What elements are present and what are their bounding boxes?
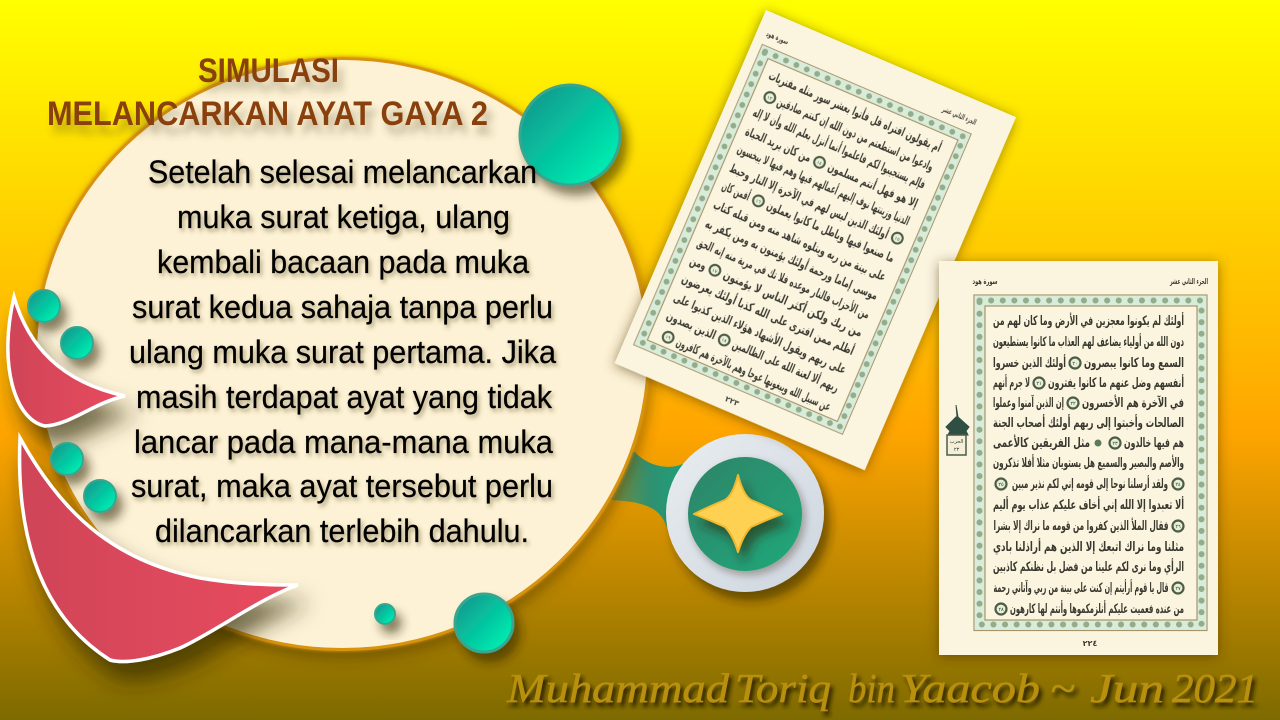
teal dot medium bbox=[455, 594, 513, 652]
connector between circle and star button bbox=[600, 452, 700, 540]
teal dot 3 bbox=[51, 443, 83, 475]
body text: Setelah selesai melancarkan bbox=[148, 154, 537, 190]
Quran page 224: الجزء الثاني عشر bbox=[1169, 277, 1208, 286]
signature: 2021 bbox=[1172, 665, 1258, 711]
body text bbox=[129, 154, 557, 549]
red shape upper bbox=[8, 297, 125, 426]
Quran page 224: أولئك الذين خسروا bbox=[993, 354, 1066, 371]
Quran page 223, tilted: على بينة من ربه ويتلوه شاهد منه ومن قبله كتاب bbox=[711, 197, 888, 284]
large cream circle panel bbox=[34, 57, 650, 651]
ayah markers bbox=[660, 91, 935, 412]
Quran page 224: السمع وما كانوا يبصرون bbox=[1084, 356, 1184, 371]
Quran page 223, tilted: سورة هود bbox=[765, 29, 790, 46]
ayah markers: ١٩ bbox=[664, 334, 672, 342]
ayah markers bbox=[996, 358, 1184, 614]
signature: Jun bbox=[1090, 665, 1164, 711]
body text: muka surat ketiga, ulang bbox=[177, 199, 510, 235]
Quran page 223, tilted: الدنيا وزينتها نوف إليهم أعمالهم فيها وهم فيها لا يبخسون bbox=[735, 140, 913, 228]
ayah markers: ١٦ bbox=[754, 198, 762, 206]
red shape lower bbox=[20, 438, 298, 662]
Quran page 223, tilted: الجزء الثاني عشر bbox=[941, 104, 978, 127]
Quran page 223, tilted: عن سبيل الله ويبغونها عوجا وهم بالآخرة هم كافرون bbox=[674, 335, 833, 414]
Quran page 223, tilted: ٢٢٣ bbox=[724, 394, 741, 408]
ayah markers: ٢٣ bbox=[1112, 441, 1118, 447]
signature bbox=[506, 665, 1258, 711]
decorative teal circle large bbox=[520, 85, 620, 185]
ayah markers: ١٥ bbox=[893, 235, 901, 243]
Quran page 223, tilted: فإلم يستجيبوا لكم فاعلموا أنما أنزل بعلم الله وأن لا إله bbox=[751, 103, 928, 192]
Quran page 224: لا جرم أنهم bbox=[993, 374, 1030, 391]
ayah markers: ٢٨ bbox=[998, 607, 1004, 613]
Quran page 223, tilted: ربهم ألا لعنة الله على الظالمين bbox=[730, 336, 842, 395]
Quran page 223, tilted: أولئك الذين ليس لهم في الآخرة إلا النار وحبط bbox=[728, 159, 892, 242]
Quran page 223, tilted: من ربك ولكن أكثر الناس لا يؤمنون bbox=[721, 266, 865, 340]
signature: Toriq bbox=[735, 665, 831, 711]
body text: masih terdapat ayat yang tidak bbox=[136, 379, 553, 415]
body text: dilancarkan terlebih dahulu. bbox=[155, 513, 529, 549]
Quran page 223, tilted: موسى إماما ورحمة أولئك يؤمنون به ومن يكفر به bbox=[703, 215, 881, 303]
signature: ~ bbox=[1050, 665, 1075, 711]
Quran page 224: أنفسهم وضل عنهم ما كانوا يفترون bbox=[1048, 374, 1184, 391]
body text: kembali bacaan pada muka bbox=[157, 244, 530, 280]
Quran page 223, tilted: أم يقولون افتراه قل فأتوا بعشر سور مثله مفتريات bbox=[766, 67, 944, 156]
Quran page 224: هم فيها خالدون bbox=[1124, 436, 1184, 451]
ayah markers: ٢٦ bbox=[1175, 524, 1181, 530]
body text: ulang muka surat pertama. Jika bbox=[129, 334, 557, 370]
icon: page medallion bbox=[946, 405, 969, 455]
Quran page 224: مثلنا وما نراك اتبعك إلا الذين هم أراذلنا بادي bbox=[993, 538, 1184, 555]
Quran page 224: سورة هود bbox=[972, 277, 998, 286]
body text: lancar pada mana-mana muka bbox=[134, 424, 554, 460]
Quran page 223, tilted: الذين يصدون bbox=[664, 308, 718, 343]
ayah markers: ٢٢ bbox=[1070, 401, 1076, 407]
Quran page 223, tilted: ما صنعوا فيها وباطل ما كانوا يعملون bbox=[765, 197, 897, 265]
ayah markers: ٢١ bbox=[1036, 381, 1042, 387]
teal dot 2 bbox=[61, 327, 93, 359]
Quran page 223, tilted bbox=[615, 10, 1016, 470]
ayah markers: ٢٤ bbox=[1175, 482, 1181, 488]
Quran page 223, tilted: من الأحزاب فالنار موعده فلا تك في مرية منه إنه الحق bbox=[695, 234, 872, 321]
Quran page 224: إن الذين آمنوا وعملوا bbox=[993, 394, 1064, 411]
Quran page 223, tilted: أفمن كان bbox=[720, 177, 753, 203]
Quran page 223, tilted: إلا هو فهل أنتم مسلمون bbox=[826, 158, 921, 211]
title: MELANCARKAN AYAT GAYA 2 bbox=[47, 95, 488, 133]
signature: bin bbox=[848, 665, 895, 711]
title bbox=[47, 52, 488, 133]
teal dot 1 bbox=[28, 290, 60, 322]
Quran page 223, tilted: ومن bbox=[688, 252, 709, 273]
Quran page 223, tilted: وادعوا من استطعتم من دون الله إن كنتم صادقين bbox=[775, 94, 936, 174]
ayah markers: ٢٧ bbox=[1175, 586, 1181, 592]
Quran page 223, tilted: على ربهم ويقول الأشهاد هؤلاء الذين كذبوا على bbox=[671, 290, 848, 377]
ayah markers: ١٤ bbox=[816, 159, 823, 167]
body text: surat, maka ayat tersebut perlu bbox=[131, 468, 553, 504]
Quran page 223, tilted: من كان يريد الحياة bbox=[743, 123, 814, 165]
signature: Yaacob bbox=[900, 665, 1040, 711]
icon: page medallion: الحزب bbox=[950, 439, 963, 445]
ayah markers: ٢٠ bbox=[1072, 361, 1078, 367]
title: SIMULASI bbox=[198, 52, 339, 90]
Quran page 224: في الآخرة هم الأخسرون bbox=[1082, 394, 1184, 411]
Quran page 224: مثل الفريقين كالأعمى bbox=[993, 434, 1090, 451]
teal dot 4 bbox=[84, 480, 116, 512]
icon: page medallion: ٢٣ bbox=[954, 447, 959, 453]
ayah markers: ٢٥ bbox=[998, 482, 1004, 488]
icon: four-point star bbox=[694, 475, 782, 552]
teal dot small bbox=[375, 604, 395, 624]
body text: surat kedua sahaja tanpa perlu bbox=[132, 289, 553, 325]
Quran page 224: ٢٢٤ bbox=[1083, 639, 1097, 648]
ayah markers: ١٣ bbox=[766, 95, 773, 102]
signature: Muhammad bbox=[506, 665, 730, 711]
ayah markers: ١٨ bbox=[720, 337, 728, 345]
Quran page 224 bbox=[939, 261, 1218, 655]
ayah markers: ١٧ bbox=[711, 267, 718, 275]
Quran page 223, tilted: أظلم ممن افترى على الله كذبا أولئك يعرضون bbox=[679, 270, 857, 358]
star button bbox=[666, 434, 824, 592]
